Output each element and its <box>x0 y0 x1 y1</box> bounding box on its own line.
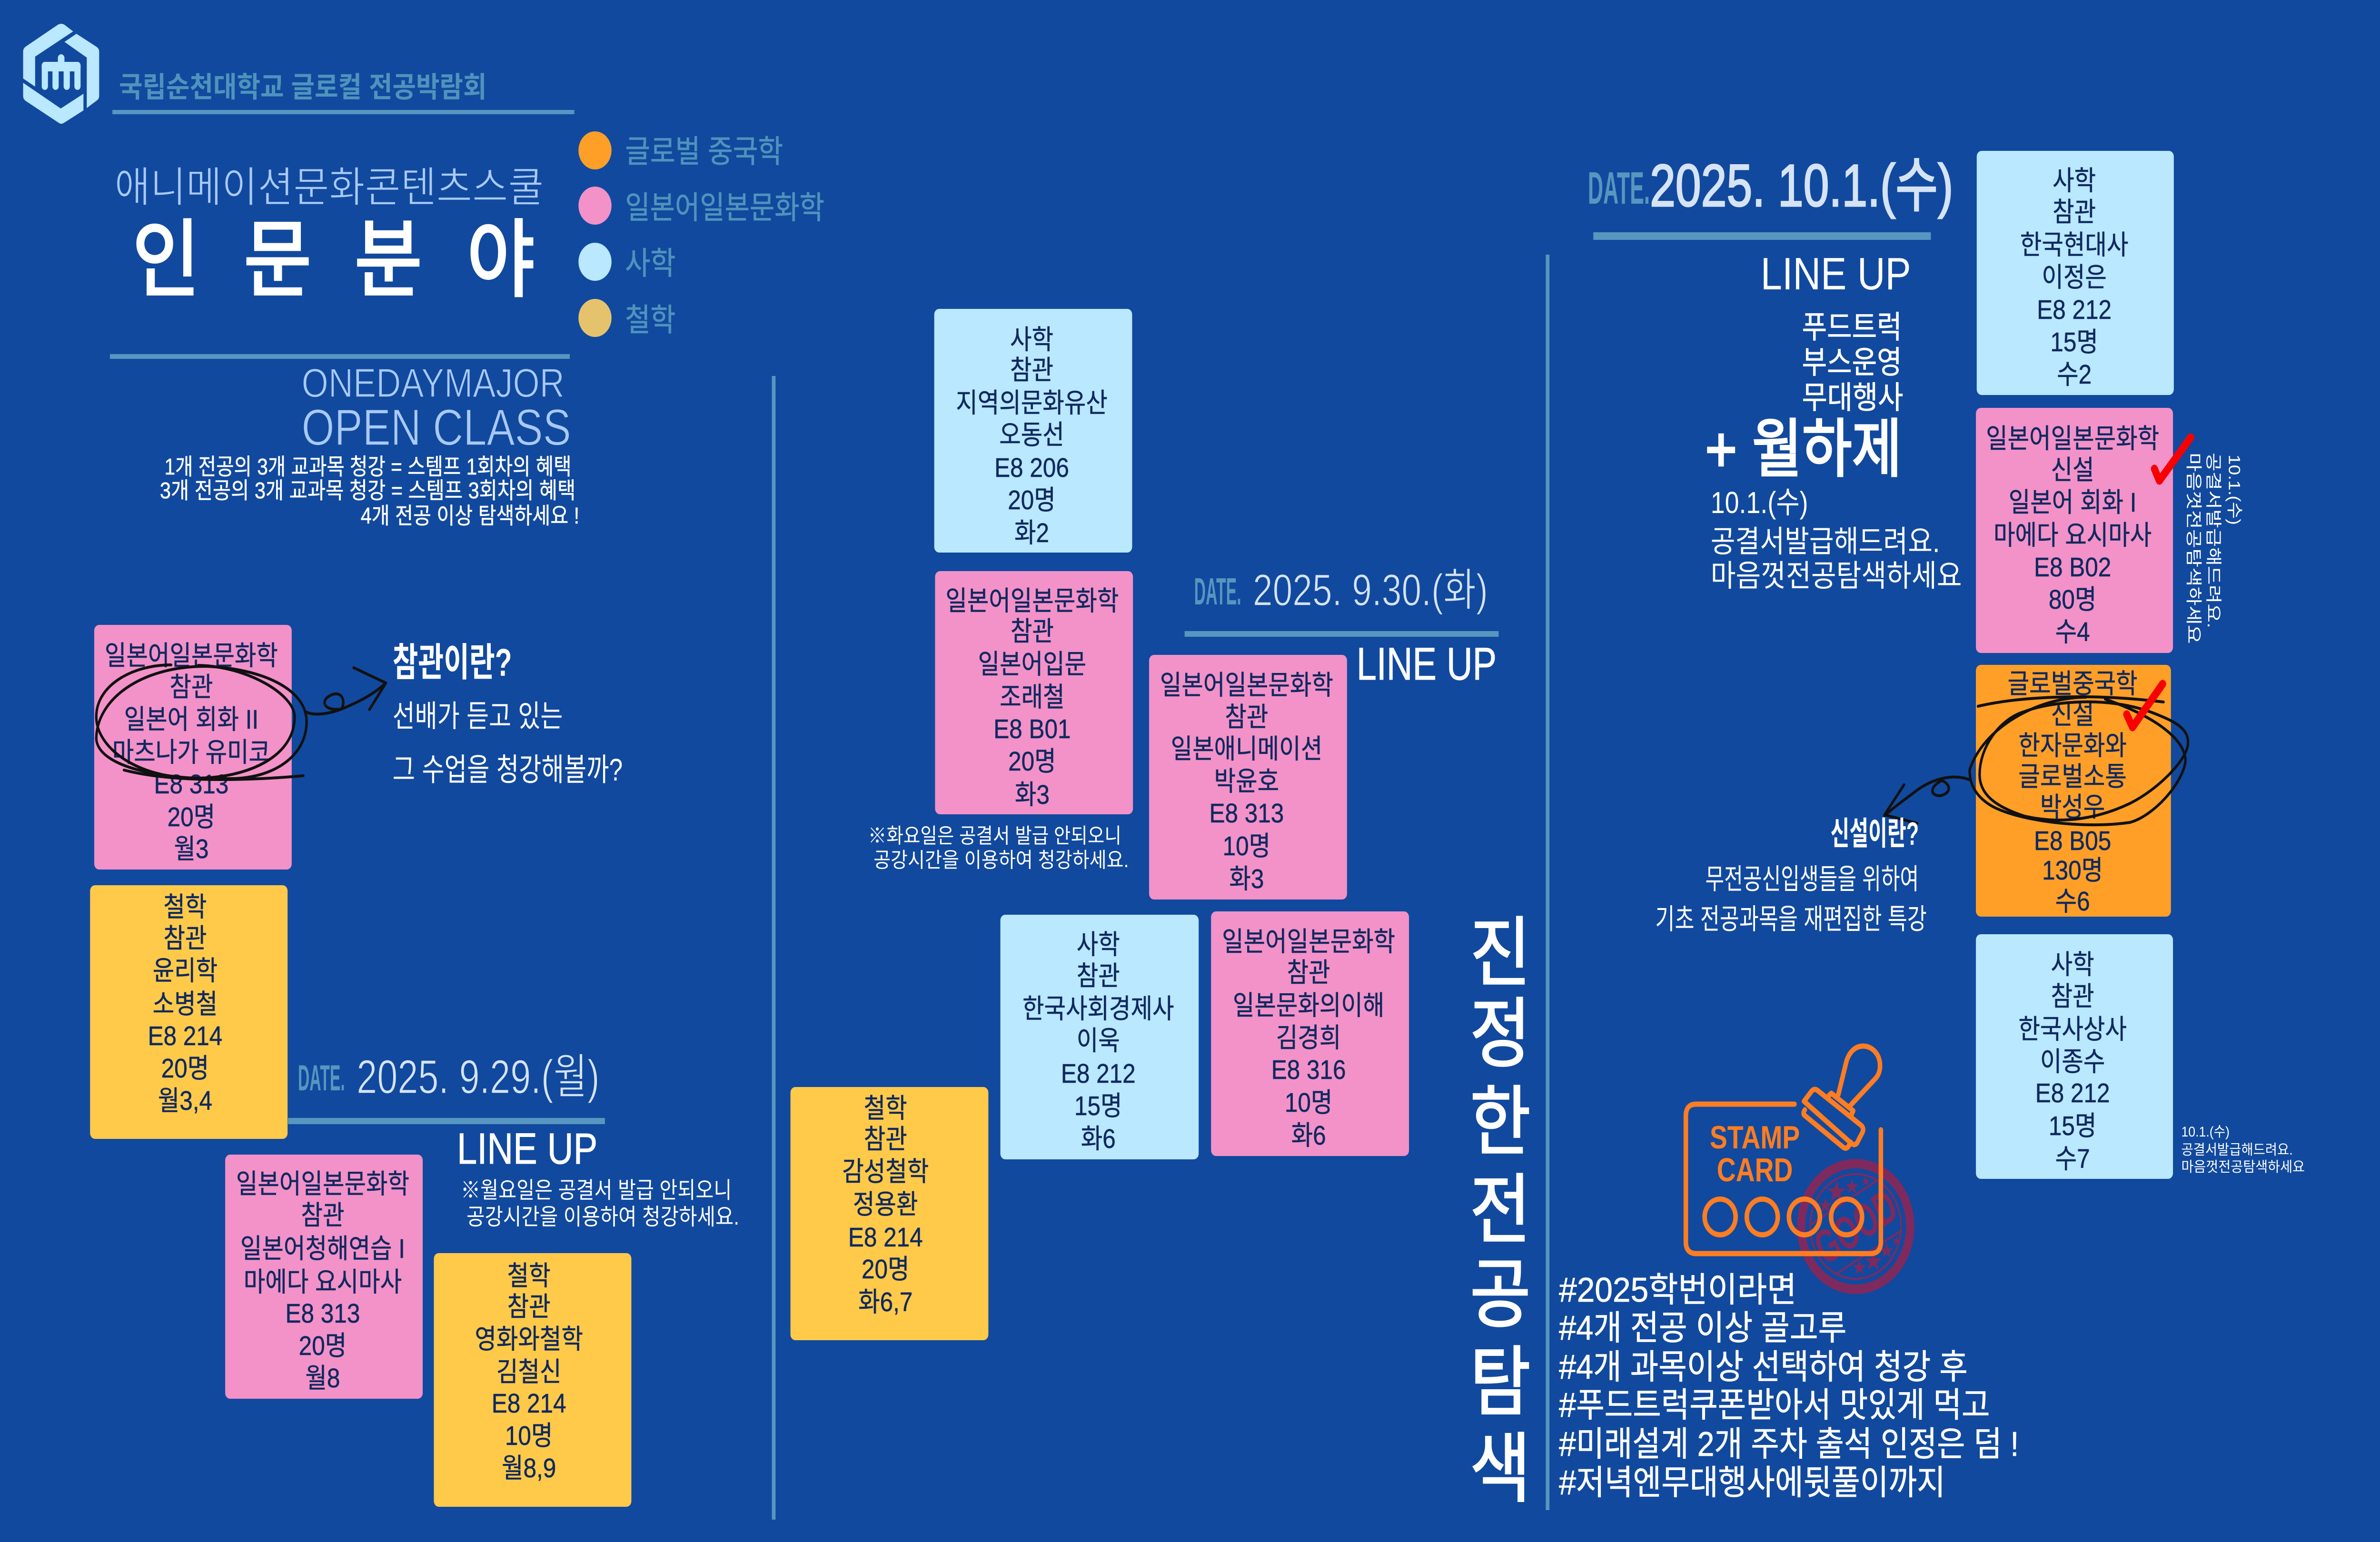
card: Japanese listening I: 20명 <box>299 1331 347 1361</box>
card: film and philosophy: 김철신 <box>496 1357 561 1387</box>
text: absence note <box>1711 485 1962 593</box>
text: small absence note: 공결서발급해드려요. <box>2181 1142 2293 1157</box>
card: understanding Japanese culture: 김경희 <box>1276 1023 1341 1053</box>
card: Korean socioeconomic history: 사학 <box>1077 930 1120 960</box>
legend: departments: 글로벌 중국학 <box>625 134 783 169</box>
card: intro Japanese: 일본어입문 <box>978 650 1086 680</box>
date: Sep 30: DATE. <box>1194 570 1241 613</box>
title: humanities: 인 문 분 야 <box>0 213 535 307</box>
card: Japanese conversation I <box>1976 408 2173 653</box>
card: understanding Japanese culture: 참관 <box>1287 958 1330 988</box>
title: vertical slogan: 색 <box>1470 1426 1531 1512</box>
card: Japanese conversation I: 일본어 회화 I <box>2009 488 2137 518</box>
text: stamp rules <box>160 454 579 529</box>
card: Japanese listening I <box>225 1155 423 1399</box>
card: film and philosophy: 철학 <box>507 1261 551 1291</box>
icon: good stamp: GOOD <box>1806 1178 1905 1275</box>
card: Korean thought history: 수7 <box>2055 1144 2090 1174</box>
card: film and philosophy: 참관 <box>507 1292 551 1322</box>
card: understanding Japanese culture: 화6 <box>1291 1121 1326 1151</box>
header: fair name: 국립순천대학교 글로컬 전공박람회 <box>119 71 487 103</box>
note: Tuesday <box>868 824 1129 872</box>
card: film and philosophy: 월8,9 <box>502 1453 556 1483</box>
card: modern Korean history: 참관 <box>2053 198 2096 227</box>
title: vertical slogan: 한 <box>1470 1079 1531 1165</box>
card: understanding Japanese culture <box>1211 911 1409 1156</box>
card: ethics: 소병철 <box>153 989 218 1019</box>
text: hashtags: #4개 과목이상 선택하여 청강 후 <box>1559 1348 1968 1386</box>
card: Chinese characters and global communication: 박성우 <box>2040 792 2105 822</box>
card: film and philosophy: E8 214 <box>492 1389 566 1419</box>
icon: good stamp <box>1801 1164 1910 1289</box>
icon: good stamp: ★ <box>1880 1242 1894 1260</box>
card: ethics: 월3,4 <box>158 1086 212 1116</box>
icon: good stamp: ★ <box>1852 1258 1866 1276</box>
card: Korean thought history: 15명 <box>2049 1111 2096 1141</box>
card: Korean thought history: 한국사상사 <box>2018 1015 2127 1045</box>
heading: line up Wednesday: LINE UP <box>1761 249 1911 299</box>
card: Japanese listening I: 참관 <box>301 1201 344 1231</box>
card: Japanese animation: 일본어일본문화학 <box>1160 671 1333 701</box>
icon: university logo <box>23 24 99 124</box>
card: Japanese conversation I: E8 B02 <box>2034 553 2111 583</box>
card: aesthetic philosophy: 참관 <box>864 1125 907 1155</box>
card: regional cultural heritage: 사학 <box>1010 325 1053 355</box>
callout: what is a new course: 무전공신입생들을 위하여 <box>1705 863 1919 895</box>
card: understanding Japanese culture: 일본어일본문화학 <box>1222 927 1395 957</box>
card: intro Japanese: E8 B01 <box>993 714 1071 744</box>
card: aesthetic philosophy: E8 214 <box>848 1223 923 1253</box>
card: Korean socioeconomic history <box>1001 915 1199 1159</box>
card: intro Japanese: 화3 <box>1015 780 1050 810</box>
icon: good stamp: ★ <box>1827 1178 1846 1205</box>
title: vertical slogan: 전 <box>1470 1167 1531 1253</box>
card: Korean thought history <box>1976 934 2173 1179</box>
text: small absence note: 마음껏전공탐색하세요 <box>2181 1159 2305 1175</box>
text: small absence note: 10.1.(수) <box>2181 1124 2230 1139</box>
note: Monday: ※월요일은 공결서 발급 안되오니 <box>461 1177 732 1203</box>
card: intro Japanese: 참관 <box>1011 617 1054 647</box>
icon: stamp card: CARD <box>1717 1151 1793 1188</box>
scribble: circle and arrow to new course note <box>1884 697 2188 825</box>
card: Chinese characters and global communication: 수6 <box>2055 887 2090 917</box>
card: aesthetic philosophy <box>791 1087 988 1340</box>
icon: good stamp: ★ <box>1864 1249 1883 1273</box>
title: vertical slogan: 정 <box>1470 991 1531 1077</box>
card: Japanese conversation II: 20명 <box>168 802 215 832</box>
card: ethics: 20명 <box>161 1054 209 1084</box>
card: Japanese conversation I: 80명 <box>2049 585 2096 615</box>
card: understanding Japanese culture: 일본문화의이해 <box>1233 991 1384 1021</box>
card: Japanese animation: 참관 <box>1225 702 1268 732</box>
card: Chinese characters and global communication: E8 B05 <box>2034 826 2111 856</box>
card: Korean thought history: E8 212 <box>2035 1078 2110 1108</box>
legend: departments: 일본어일본문화학 <box>625 190 824 226</box>
text: hashtags: #저녁엔무대행사에뒷풀이까지 <box>1559 1464 1945 1502</box>
card: regional cultural heritage: 참관 <box>1010 356 1053 386</box>
card: Japanese animation: 화3 <box>1229 864 1264 894</box>
card: regional cultural heritage: 화2 <box>1014 518 1049 548</box>
note: Monday: 공강시간을 이용하여 청강하세요. <box>466 1204 739 1230</box>
card: modern Korean history: 15명 <box>2050 327 2098 357</box>
date: Oct 1: DATE. <box>1588 163 1650 214</box>
callout: what is observation: 참관이란? <box>393 641 512 684</box>
text: rotated absence note: 마음껏전공탐색하세요 <box>2184 453 2203 644</box>
card: modern Korean history: 한국현대사 <box>2020 230 2128 260</box>
callout: what is observation <box>393 641 623 788</box>
card: Korean socioeconomic history: 한국사회경제사 <box>1022 994 1174 1024</box>
heading: open class: OPEN CLASS <box>302 399 571 456</box>
icon: red check mark one <box>2154 437 2191 481</box>
callout: what is observation: 그 수업을 청강해볼까? <box>393 752 623 788</box>
text: events: 부스운영 <box>1802 345 1902 380</box>
card: film and philosophy: 10명 <box>505 1421 553 1451</box>
text: events: 푸드트럭 <box>1802 310 1902 345</box>
heading: line up Monday: LINE UP <box>457 1125 597 1173</box>
card: regional cultural heritage <box>934 309 1132 553</box>
text: absence note: 마음껏전공탐색하세요 <box>1711 559 1962 593</box>
card: aesthetic philosophy: 20명 <box>862 1255 910 1285</box>
card: regional cultural heritage: 지역의문화유산 <box>956 388 1108 418</box>
card: Chinese characters and global communication: 130명 <box>2042 856 2103 886</box>
text: plus festival: + 월하제 <box>1705 413 1902 485</box>
card: Japanese animation: E8 313 <box>1210 799 1284 829</box>
card: ethics: 철학 <box>163 892 207 922</box>
card: ethics: 참관 <box>163 924 207 954</box>
heading: one day major: ONEDAYMAJOR <box>302 360 565 405</box>
text: rotated absence note: 10.1.(수) <box>2225 455 2244 525</box>
card: Japanese listening I: 마에다 요시마사 <box>244 1267 402 1297</box>
card: Chinese characters and global communication: 글로벌중국학 <box>2008 669 2138 699</box>
card: Japanese conversation II: 마츠나가 유미코 <box>112 738 270 768</box>
title: school name: 애니메이션문화콘텐츠스쿨 <box>114 164 544 211</box>
card: intro Japanese: 일본어일본문화학 <box>945 586 1119 616</box>
legend: departments: 사학 <box>625 246 675 281</box>
card: aesthetic philosophy: 감성철학 <box>842 1157 929 1187</box>
callout: what is a new course <box>1655 816 1927 935</box>
card: intro Japanese <box>935 571 1133 814</box>
icon: stamp card <box>1686 1046 1881 1254</box>
text: stamp rules: 1개 전공의 3개 교과목 청강 = 스템프 1회차의 혜택 <box>164 454 572 480</box>
card: Japanese listening I: E8 313 <box>286 1299 360 1329</box>
scribble: circle and arrow to observation note <box>96 665 386 780</box>
heading: line up Tuesday: LINE UP <box>1357 638 1497 690</box>
text: absence note: 공결서발급해드려요. <box>1711 524 1940 559</box>
card: Japanese conversation II: 일본어 회화 II <box>124 705 258 735</box>
card: Japanese listening I: 일본어청해연습 I <box>240 1234 405 1264</box>
card: Korean thought history: 사학 <box>2051 950 2094 980</box>
card: Japanese animation: 일본애니메이션 <box>1171 734 1322 764</box>
text: rotated absence note: 공결서발급해드려요. <box>2204 453 2223 628</box>
note: Tuesday: 공강시간을 이용하여 청강하세요. <box>873 848 1129 872</box>
text: stamp rules: 4개 전공 이상 탐색하세요 ! <box>361 503 579 529</box>
card: ethics: E8 214 <box>148 1021 222 1051</box>
card: intro Japanese: 20명 <box>1008 747 1056 777</box>
text: hashtags: #미래설계 2개 주차 출석 인정은 덤 ! <box>1559 1425 2019 1463</box>
text: hashtags <box>1559 1271 2019 1502</box>
card: Korean socioeconomic history: 15명 <box>1074 1091 1122 1121</box>
card: understanding Japanese culture: E8 316 <box>1271 1055 1346 1085</box>
card: Chinese characters and global communication: 글로벌소통 <box>2018 762 2127 792</box>
title: vertical slogan <box>1470 910 1531 1512</box>
card: Korean thought history: 이종수 <box>2040 1047 2105 1077</box>
card: Korean socioeconomic history: 이욱 <box>1077 1026 1120 1056</box>
text: hashtags: #4개 전공 이상 골고루 <box>1559 1309 1846 1347</box>
icon: red check mark two <box>2127 684 2162 727</box>
card: regional cultural heritage: 20명 <box>1008 485 1056 515</box>
card: Japanese conversation II <box>94 625 292 870</box>
card: Japanese listening I: 일본어일본문화학 <box>236 1169 409 1199</box>
text: rotated absence note <box>2184 453 2244 644</box>
card: Chinese characters and global communication <box>1976 665 2171 917</box>
card: modern Korean history: E8 212 <box>2037 295 2112 325</box>
icon: good stamp: ★ <box>1892 1236 1901 1247</box>
card: Japanese listening I: 월8 <box>305 1364 340 1394</box>
callout: what is observation: 선배가 듣고 있는 <box>393 699 563 733</box>
text: events: 무대행사 <box>1802 380 1903 415</box>
card: modern Korean history <box>1977 151 2174 395</box>
card: Chinese characters and global communication: 한자문화와 <box>2018 731 2127 761</box>
title: vertical slogan: 공 <box>1470 1252 1531 1337</box>
card: modern Korean history: 사학 <box>2053 166 2096 196</box>
icon: stamp card: STAMP <box>1710 1119 1800 1156</box>
legend: departments <box>578 131 824 338</box>
card: Korean socioeconomic history: 화6 <box>1081 1124 1116 1154</box>
icon: good stamp: ★ <box>1818 1196 1833 1215</box>
text: hashtags: #2025학번이라면 <box>1559 1271 1796 1309</box>
title: vertical slogan: 탐 <box>1470 1340 1531 1425</box>
note: Monday <box>461 1177 739 1230</box>
date: Oct 1: 2025. 10.1.(수) <box>1650 152 1953 219</box>
icon: good stamp: ★ <box>1861 1176 1870 1187</box>
card: aesthetic philosophy: 화6,7 <box>858 1287 912 1317</box>
card: ethics <box>90 885 288 1139</box>
card: film and philosophy <box>434 1253 631 1507</box>
text: small absence note <box>2181 1124 2305 1175</box>
card: understanding Japanese culture: 10명 <box>1285 1088 1332 1118</box>
card: Japanese conversation I: 신설 <box>2051 455 2094 485</box>
note: Tuesday: ※화요일은 공결서 발급 안되오니 <box>868 824 1121 848</box>
card: Japanese animation: 박윤호 <box>1214 767 1279 797</box>
text: events <box>1802 310 1903 415</box>
card: Japanese conversation II: E8 313 <box>154 770 228 800</box>
card: Japanese conversation II: 월3 <box>174 834 208 864</box>
card: Japanese animation: 10명 <box>1223 831 1270 861</box>
legend: departments: 철학 <box>625 303 675 338</box>
date: Sep 29: 2025. 9.29.(월) <box>357 1050 600 1103</box>
text: stamp rules: 3개 전공의 3개 교과목 청강 = 스템프 3회차의 혜택 <box>160 477 575 504</box>
card: Japanese animation <box>1149 655 1347 900</box>
date: Sep 29: DATE. <box>298 1058 345 1098</box>
date: Sep 30: 2025. 9.30.(화) <box>1253 565 1488 615</box>
card: Chinese characters and global communication: 신설 <box>2051 700 2094 730</box>
card: modern Korean history: 수2 <box>2057 360 2092 390</box>
card: Japanese conversation I: 마에다 요시마사 <box>1993 521 2152 551</box>
card: modern Korean history: 이정은 <box>2042 263 2107 293</box>
card: Korean socioeconomic history: 참관 <box>1077 961 1120 991</box>
card: regional cultural heritage: 오동선 <box>999 420 1064 450</box>
card: intro Japanese: 조래철 <box>1000 682 1065 712</box>
card: Korean socioeconomic history: E8 212 <box>1061 1059 1136 1089</box>
text: hashtags: #푸드트럭쿠폰받아서 맛있게 먹고 <box>1559 1386 1990 1424</box>
card: film and philosophy: 영화와철학 <box>475 1325 583 1354</box>
text: absence note: 10.1.(수) <box>1711 485 1808 520</box>
card: aesthetic philosophy: 정용환 <box>853 1190 918 1220</box>
card: ethics: 윤리학 <box>153 956 218 986</box>
card: aesthetic philosophy: 철학 <box>864 1094 907 1124</box>
title: vertical slogan: 진 <box>1470 910 1531 996</box>
callout: what is a new course: 신설이란? <box>1830 816 1919 852</box>
icon: good stamp: ★ <box>1845 1177 1859 1196</box>
card: regional cultural heritage: E8 206 <box>994 453 1069 483</box>
card: Japanese conversation II: 참관 <box>169 672 213 702</box>
card: Japanese conversation I: 수4 <box>2055 617 2090 647</box>
card: Japanese conversation II: 일본어일본문화학 <box>105 641 278 671</box>
card: Korean thought history: 참관 <box>2051 982 2094 1012</box>
card: Japanese conversation I: 일본어일본문화학 <box>1986 424 2159 454</box>
callout: what is a new course: 기초 전공과목을 재편집한 특강 <box>1655 903 1927 935</box>
